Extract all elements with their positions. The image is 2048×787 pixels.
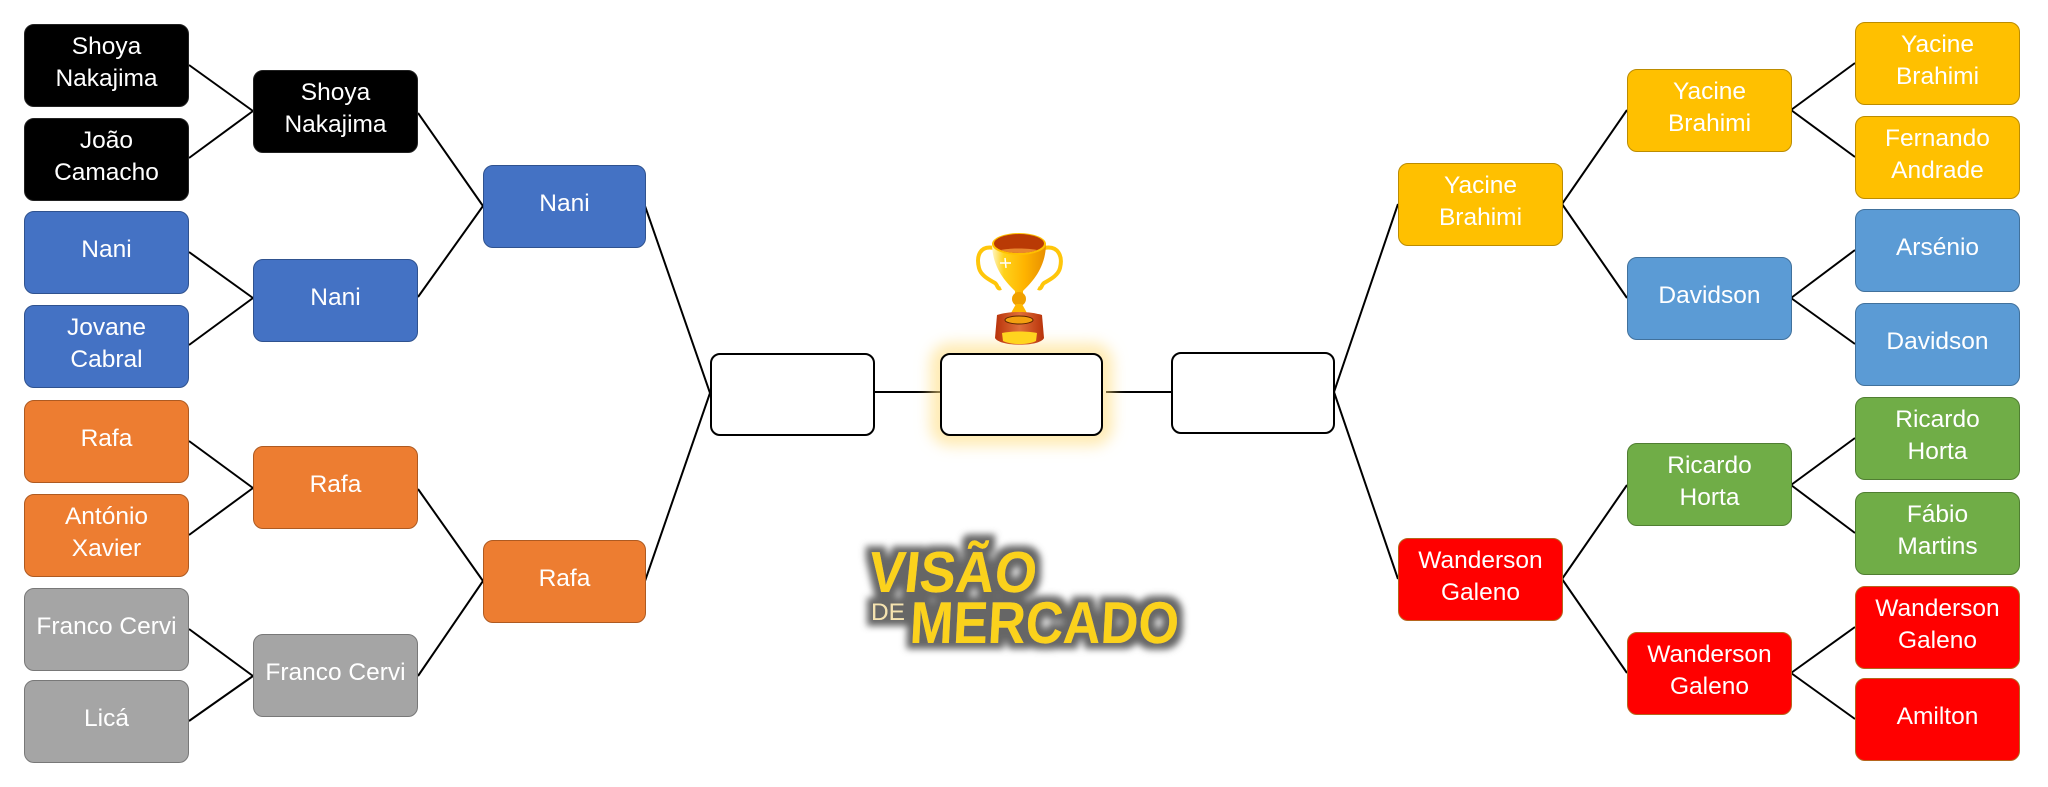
left round 1: João Camacho: Camacho [54,159,159,186]
right round 2: Davidson: Davidson [1658,282,1761,309]
logo: Visão de Mercado: MERCADO [908,590,1181,656]
right round 1: Fábio Martins: Fábio [1907,501,1968,528]
left round 2: Shoya Nakajima: Shoya [301,79,370,106]
left round 1: António Xavier: António [65,503,148,530]
left round 1: Rafa: Rafa [81,425,132,452]
right round 3: Yacine Brahimi: Brahimi [1439,204,1522,231]
right round 2: Wanderson Galeno: Wanderson [1647,641,1772,668]
left round 2: Nani [253,259,418,342]
left round 3: Nani: Nani [539,190,590,217]
right round 2: Davidson [1627,257,1792,340]
right semifinal empty box [1171,352,1335,434]
left round 1: Shoya Nakajima [24,24,189,107]
left round 2: Franco Cervi [253,634,418,717]
left round 1: Shoya Nakajima: Shoya [72,33,141,60]
right round 2: Ricardo Horta: Horta [1680,484,1739,511]
left round 1: Nani: Nani [81,236,132,263]
right round 1: Wanderson Galeno: Galeno [1898,627,1977,654]
left round 1: Shoya Nakajima: Nakajima [55,65,158,92]
right round 1: Yacine Brahimi: Brahimi [1896,63,1979,90]
left round 1: João Camacho [24,118,189,201]
right round 3: Wanderson Galeno: Galeno [1441,579,1520,606]
right round 1: Wanderson Galeno [1855,586,2020,669]
right round 1: Yacine Brahimi: Yacine [1901,31,1974,58]
right round 1: Amilton: Amilton [1897,703,1978,730]
left round 1: Jovane Cabral [24,305,189,388]
logo: Visão de Mercado [860,529,1188,656]
final empty box with glow [940,353,1103,436]
left round 1: António Xavier: Xavier [72,535,141,562]
left round 1: António Xavier [24,494,189,577]
left round 1: Franco Cervi: Franco Cervi [36,613,177,640]
right round 1: Wanderson Galeno: Wanderson [1875,595,2000,622]
right round 3: Yacine Brahimi: Yacine [1444,172,1517,199]
right round 1: Fernando Andrade: Andrade [1891,157,1984,184]
right round 1: Ricardo Horta: Horta [1908,438,1967,465]
left round 1: Jovane Cabral: Jovane [67,314,146,341]
right round 2: Ricardo Horta: Ricardo [1667,452,1752,479]
right round 1: Fábio Martins: Martins [1897,533,1978,560]
left round 3: Rafa: Rafa [539,565,590,592]
right round 2: Yacine Brahimi [1627,69,1792,152]
left round 2: Nani: Nani [310,284,361,311]
left round 1: Jovane Cabral: Cabral [70,346,143,373]
right round 1: Davidson [1855,303,2020,386]
left semifinal empty box [710,353,875,436]
right round 1: Fernando Andrade [1855,116,2020,199]
right round 1: Yacine Brahimi [1855,22,2020,105]
logo: Visão de Mercado: DE [871,599,905,626]
icon: gold trophy [976,233,1063,345]
right round 3: Yacine Brahimi [1398,163,1563,246]
right round 1: Amilton [1855,678,2020,761]
logo: Visão de Mercado: VISÃO [866,540,1040,605]
left round 2: Shoya Nakajima: Nakajima [284,111,387,138]
right round 2: Wanderson Galeno [1627,632,1792,715]
left round 2: Rafa: Rafa [310,471,361,498]
right round 3: Wanderson Galeno: Wanderson [1418,547,1543,574]
right round 1: Ricardo Horta [1855,397,2020,480]
right round 1: Arsénio: Arsénio [1896,234,1979,261]
left round 3: Nani [483,165,646,248]
left round 2: Franco Cervi: Franco Cervi [265,659,406,686]
right round 2: Yacine Brahimi: Yacine [1673,78,1746,105]
left round 1: João Camacho: João [80,127,133,154]
right round 3: Wanderson Galeno [1398,538,1563,621]
left round 3: Rafa [483,540,646,623]
left round 1: Nani [24,211,189,294]
left round 1: Licá [24,680,189,763]
right round 1: Ricardo Horta: Ricardo [1895,406,1980,433]
right round 2: Wanderson Galeno: Galeno [1670,673,1749,700]
right round 2: Yacine Brahimi: Brahimi [1668,110,1751,137]
right round 2: Ricardo Horta [1627,443,1792,526]
right round 1: Arsénio [1855,209,2020,292]
right round 1: Davidson: Davidson [1886,328,1989,355]
left round 1: Franco Cervi [24,588,189,671]
right round 1: Fernando Andrade: Fernando [1885,125,1990,152]
left round 1: Licá: Licá [84,705,129,732]
left round 2: Rafa [253,446,418,529]
left round 1: Rafa [24,400,189,483]
right round 1: Fábio Martins [1855,492,2020,575]
left round 2: Shoya Nakajima [253,70,418,153]
